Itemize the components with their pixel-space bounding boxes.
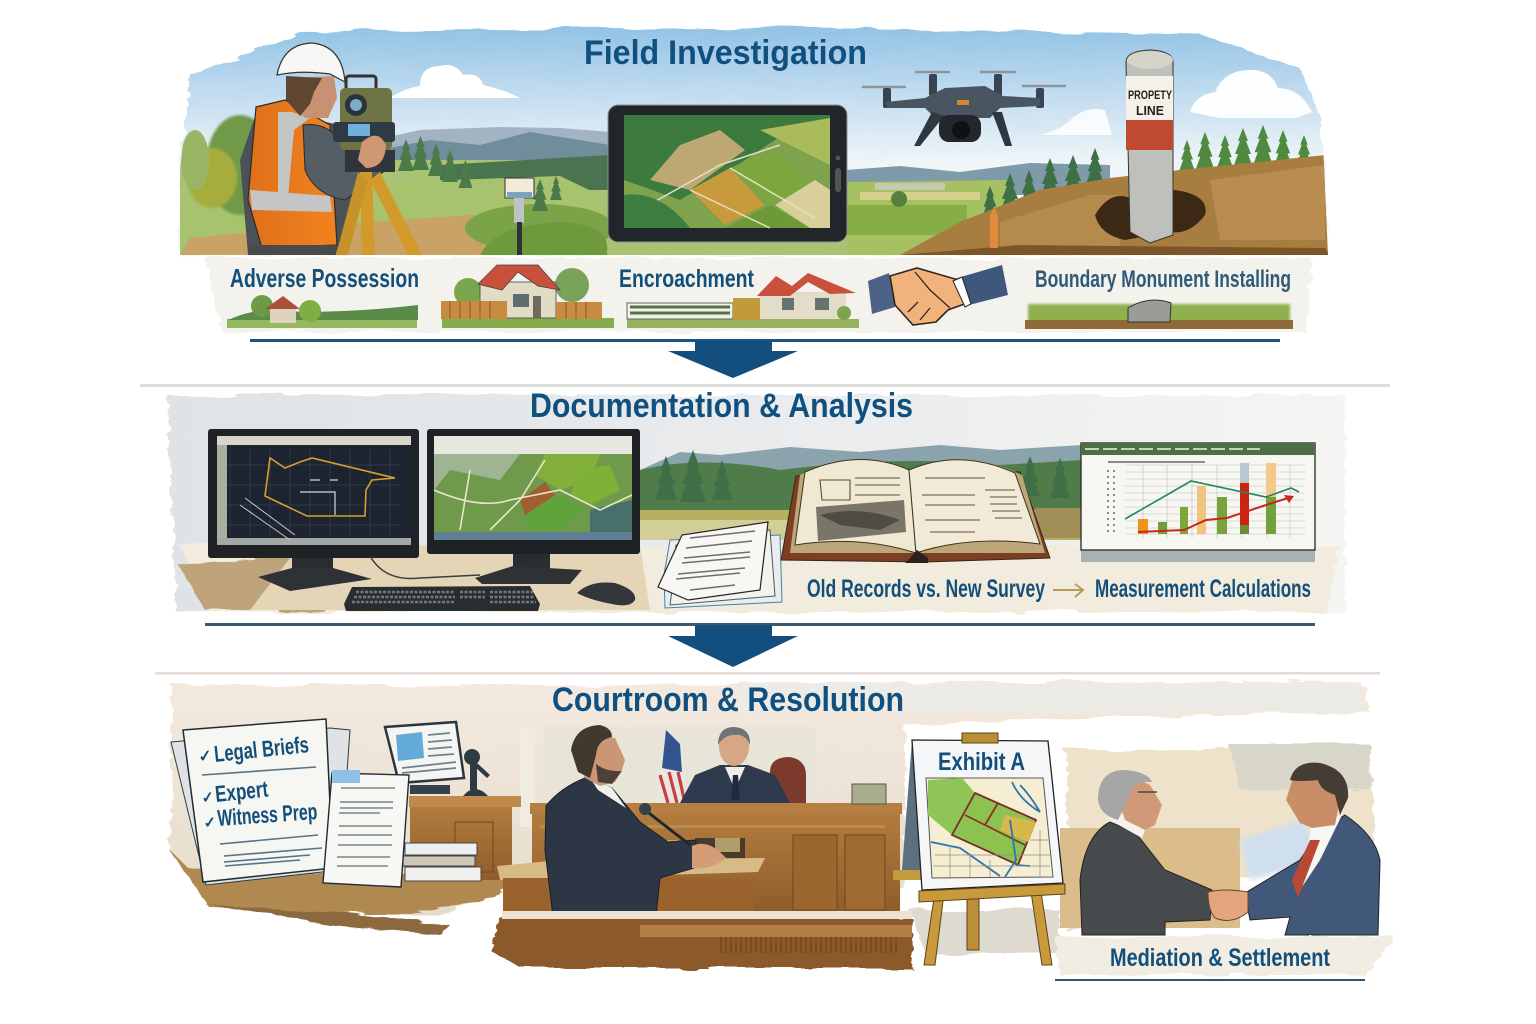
rule under documentation panel xyxy=(205,623,1315,626)
small computer monitor xyxy=(385,722,464,794)
title: courtroom and resolution: Courtroom & Resolution xyxy=(552,681,904,719)
post label text xyxy=(1128,88,1172,118)
panel: case type strip xyxy=(205,258,1312,332)
label: boundary monument installing: Boundary Monument Installing xyxy=(1035,266,1291,293)
second document and books xyxy=(323,770,481,887)
panel: field investigation xyxy=(180,27,1332,255)
exhibit map xyxy=(926,778,1053,878)
courtroom wash background xyxy=(170,682,1375,955)
arrow: field to documentation xyxy=(668,341,798,378)
checklist text: ✓ xyxy=(198,748,213,766)
rule under field panel xyxy=(250,339,1280,342)
arrow: records to calculations xyxy=(1053,584,1083,597)
title: field investigation: Field Investigation xyxy=(584,34,867,72)
attorney xyxy=(545,725,726,925)
GPS rover pole xyxy=(505,178,534,255)
clouds xyxy=(390,65,1312,135)
monitor: CAD drawing xyxy=(208,429,419,591)
icon: house and fence xyxy=(441,265,614,328)
landscape background xyxy=(180,27,1332,255)
label: encroachment: Encroachment xyxy=(619,265,755,293)
monitor: aerial parcel map xyxy=(427,429,640,584)
label: adverse possession: Adverse Possession xyxy=(230,263,419,293)
post label text: PROPETY xyxy=(1128,88,1172,102)
tablet showing aerial fields xyxy=(608,105,847,242)
lectern xyxy=(497,838,765,912)
spreadsheet chart xyxy=(1081,443,1315,562)
label: mediation and settlement: Mediation & Settlement xyxy=(1110,944,1331,972)
judge bench xyxy=(530,784,902,912)
checklist text: ✓ xyxy=(201,789,215,807)
checklist text: Witness Prep xyxy=(217,798,318,831)
title: documentation and analysis: Documentation & Analysis xyxy=(530,387,913,425)
icon: encroaching fence and house xyxy=(627,273,859,328)
icon: cottage in landscape xyxy=(227,295,418,328)
mouse xyxy=(577,582,635,605)
keyboard and cable xyxy=(344,556,540,611)
label: old records vs new survey: Old Records vs. New Survey xyxy=(807,575,1045,603)
flag xyxy=(656,728,688,803)
icon: installed boundary marker xyxy=(1025,300,1293,329)
checklist text: Legal Briefs xyxy=(213,731,310,767)
property line monument post xyxy=(1126,50,1173,243)
surveyor with hard hat and vest xyxy=(240,43,386,255)
panel: documentation and analysis xyxy=(168,387,1345,612)
gallery rail xyxy=(490,911,912,968)
desk microphone xyxy=(463,749,490,796)
icon: handshake xyxy=(868,265,1008,325)
judge xyxy=(680,727,806,803)
easel with exhibit A map xyxy=(893,733,1065,965)
panel: courtroom and resolution xyxy=(170,681,1395,981)
survey stake xyxy=(990,206,998,248)
mediation handshake figures xyxy=(1080,763,1380,935)
label: exhibit A: Exhibit A xyxy=(938,748,1025,776)
side cabinet xyxy=(409,796,521,880)
legal document with checklist xyxy=(171,719,350,885)
total station on tripod xyxy=(333,76,422,255)
checklist text xyxy=(198,731,318,832)
label: measurement calculations: Measurement Calculations xyxy=(1095,575,1311,603)
open record book xyxy=(781,459,1050,563)
infographic canvas xyxy=(140,25,1394,981)
paper stack xyxy=(658,522,782,608)
wash background and desk xyxy=(168,395,1345,612)
post label text: LINE xyxy=(1136,103,1164,118)
arrow: documentation to courtroom xyxy=(668,625,798,667)
settlement label strip xyxy=(1055,936,1395,975)
drone xyxy=(862,72,1066,146)
checklist text: Expert xyxy=(214,776,269,807)
checklist text: ✓ xyxy=(203,814,217,832)
